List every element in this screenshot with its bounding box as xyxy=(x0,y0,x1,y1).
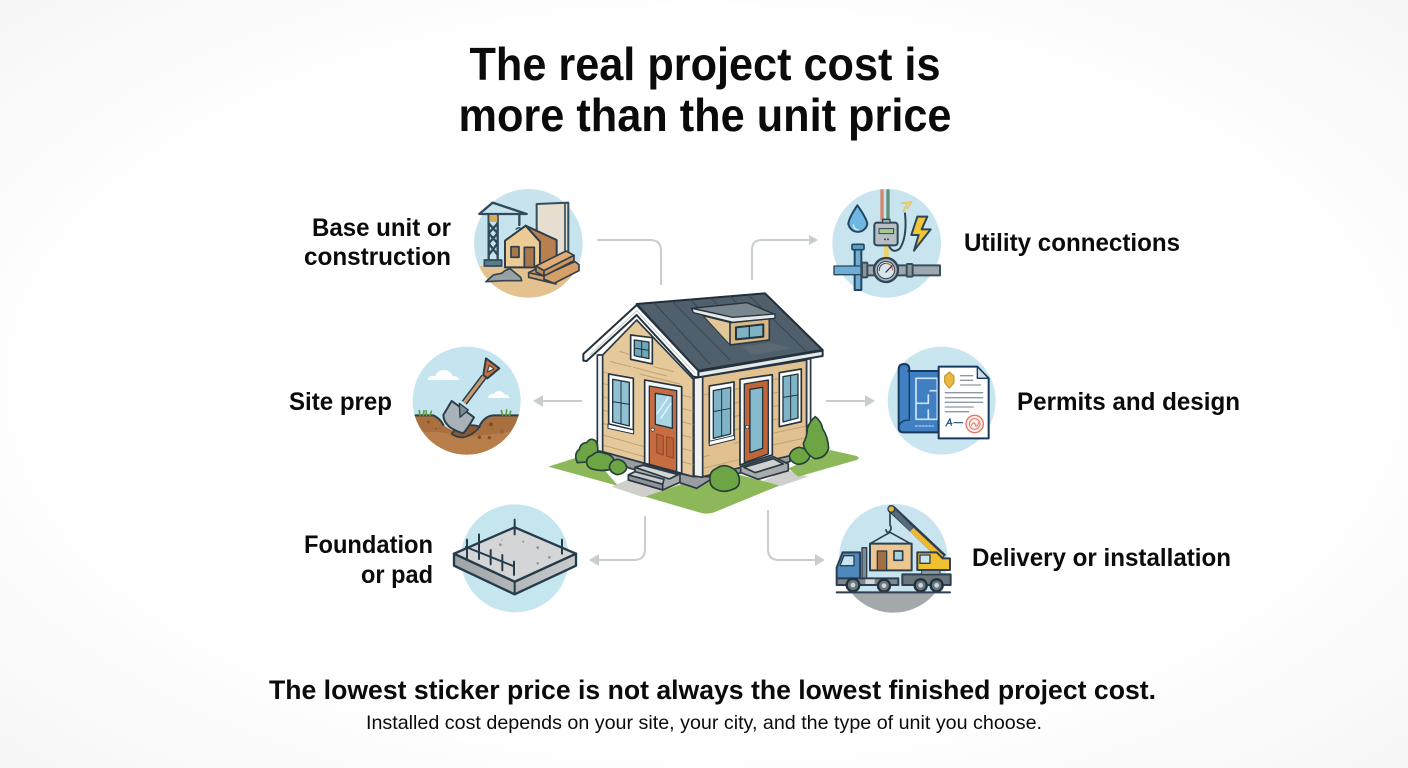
front door xyxy=(645,380,682,473)
lawn and paths xyxy=(548,450,859,514)
arrow: house to site prep xyxy=(533,395,582,407)
right wall window one xyxy=(709,382,735,446)
blueprint sheet xyxy=(899,364,943,432)
label: delivery or installation: Delivery or installation xyxy=(972,544,1231,572)
foundation xyxy=(598,450,790,488)
left wall xyxy=(603,320,693,477)
icon: site prep xyxy=(410,347,523,457)
supporting note: Installed cost depends on your site, your city, and the type of unit you choose. xyxy=(366,712,1042,734)
arrow: house to permits xyxy=(826,395,875,407)
label: site prep: Site prep xyxy=(289,388,392,416)
title: The real project cost is xyxy=(470,38,940,90)
right wall xyxy=(703,360,807,477)
arrow: house to utility connections xyxy=(752,235,818,280)
label: utility connections: Utility connections xyxy=(964,229,1180,257)
closing statement: The lowest sticker price is not always the lowest finished project cost. xyxy=(269,675,1156,705)
lumber stack xyxy=(529,251,579,284)
right wall window two xyxy=(779,369,801,427)
gable trim xyxy=(583,305,698,377)
shrubs xyxy=(576,417,829,491)
arrow: house to delivery xyxy=(768,510,825,566)
left steps xyxy=(628,465,680,490)
arrow: base unit to house xyxy=(597,240,661,285)
permit document xyxy=(939,367,989,438)
icon: utility connections xyxy=(832,189,941,298)
right steps xyxy=(741,457,788,479)
title: more than the unit price xyxy=(458,89,952,141)
corner trim xyxy=(597,355,811,477)
title xyxy=(458,38,952,141)
second door xyxy=(740,375,772,465)
label: foundation or pad: or pad xyxy=(361,561,433,589)
label: base unit or construction: Base unit or xyxy=(312,214,451,242)
icon: base unit or construction xyxy=(474,189,583,298)
central house illustration xyxy=(548,293,859,514)
icon: foundation or pad xyxy=(454,504,576,612)
icon: delivery or installation xyxy=(837,504,951,617)
label: permits and design: Permits and design xyxy=(1017,388,1240,416)
label: foundation or pad: Foundation xyxy=(304,531,433,559)
arrow: house to foundation xyxy=(589,516,645,566)
icon: permits and design xyxy=(888,347,996,455)
left wall window xyxy=(608,374,634,434)
label: foundation or pad xyxy=(304,531,433,589)
roof xyxy=(637,293,823,371)
gable window xyxy=(631,335,652,364)
label: base unit or construction: construction xyxy=(304,243,451,271)
eave fascia xyxy=(698,351,823,377)
dormer xyxy=(692,303,775,345)
label: base unit or construction xyxy=(304,214,451,271)
